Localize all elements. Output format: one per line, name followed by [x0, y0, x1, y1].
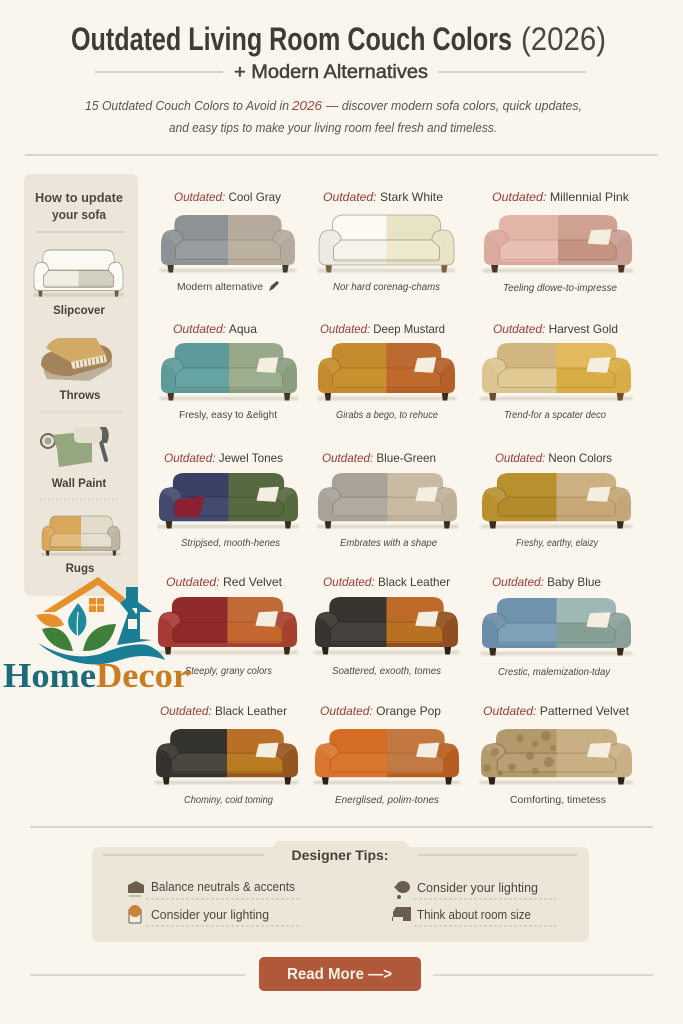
- card: blue-green: [317, 451, 458, 549]
- heading: Outdated: Baby Blue: [492, 575, 601, 589]
- icon: slipcover sofa: [33, 250, 124, 297]
- panel: designer tips: [92, 841, 589, 942]
- heading: Outdated: Jewel Tones: [164, 451, 283, 465]
- label: throws: Throws: [60, 390, 100, 402]
- label: wall paint: Wall Paint: [52, 478, 106, 490]
- tip: room size: Think about room size: [417, 908, 531, 922]
- sofa: [160, 343, 298, 400]
- heading: Outdated: Orange Pop: [320, 704, 441, 718]
- heading: Outdated: Aqua: [173, 322, 257, 336]
- caption: Fresly, easy to &elight: [179, 410, 277, 421]
- intro text: and easy tips to make your living room feel fresh and timeless.: [169, 120, 497, 135]
- logo wordmark: HomeDecor: [3, 656, 189, 695]
- intro text: 15 Outdated Couch Colors to Avoid in: [85, 98, 289, 113]
- sofa with red throw: [158, 473, 299, 529]
- sofa grid: [155, 190, 633, 806]
- title: Outdated Living Room Couch Colors: [71, 21, 512, 57]
- sofa: [157, 597, 298, 654]
- caption: Stripjsed, mooth-henes: [181, 538, 280, 549]
- card: aqua: [160, 322, 298, 421]
- tip: consider lighting: Consider your lighting: [151, 908, 269, 922]
- card: millennial pink: [483, 190, 633, 294]
- card: cool gray: [160, 190, 296, 293]
- card: red velvet: [157, 575, 298, 677]
- sofa: [481, 598, 632, 656]
- card: neon colors: [481, 451, 632, 549]
- icon: wall paint roller: [41, 427, 109, 467]
- sofa: [318, 215, 455, 272]
- sidebar heading: your sofa: [52, 208, 107, 222]
- button: read more: [259, 957, 421, 991]
- label: rugs: Rugs: [66, 563, 94, 575]
- heading: Outdated: Stark White: [323, 190, 443, 204]
- tip: room size: [392, 907, 556, 926]
- card: deep mustard: [317, 322, 456, 421]
- caption: Soattered, exooth, tomes: [332, 666, 441, 677]
- icon: rugs sofa: [41, 516, 121, 556]
- heading: Outdated: Patterned Velvet: [483, 704, 630, 718]
- heading: Outdated: Deep Mustard: [320, 322, 445, 336]
- tip: consider lighting, lamp icon: [394, 881, 556, 899]
- heading: Outdated: Black Leather: [323, 575, 450, 589]
- caption: Embrates with a shape: [340, 538, 437, 549]
- sofa with pattern: [480, 729, 633, 785]
- subtitle: + Modern Alternatives: [234, 62, 428, 83]
- button: read more: Read More —>: [287, 966, 392, 983]
- heading: Outdated: Harvest Gold: [493, 322, 618, 336]
- sidebar heading: How to update: [35, 191, 123, 205]
- card: stark white: [318, 190, 455, 293]
- intro text: 2026: [291, 98, 323, 113]
- sofa: [483, 215, 633, 272]
- heading: Outdated: Neon Colors: [495, 451, 612, 465]
- sofa: [317, 343, 456, 400]
- logo: HomeDecor: [3, 577, 191, 695]
- header: [71, 21, 606, 135]
- caption: Girabs a bego, to rehuce: [336, 410, 438, 421]
- tips heading: Designer Tips:: [292, 847, 388, 863]
- tip: consider lighting: [129, 905, 302, 926]
- caption: Freshy, earthy, elaizy: [516, 538, 599, 549]
- sofa: [314, 597, 459, 654]
- caption: Trend-for a spcater deco: [504, 410, 606, 421]
- sidebar heading: [35, 191, 123, 222]
- heading: Outdated: Red Velvet: [166, 575, 283, 589]
- card: black leather two-tone: [155, 704, 299, 806]
- sofa: [160, 215, 296, 272]
- icon: throws: [41, 338, 112, 381]
- heading: Outdated: Black Leather: [160, 704, 287, 718]
- heading: Outdated: Millennial Pink: [492, 190, 630, 204]
- card: jewel tones: [158, 451, 299, 549]
- caption: Energlised, polim-tones: [335, 795, 439, 806]
- card: baby blue: [481, 575, 632, 678]
- logo wave: [38, 643, 165, 664]
- card: orange pop: [314, 704, 460, 806]
- intro text: — discover modern sofa colors, quick updates,: [325, 98, 582, 113]
- caption: Nor hard corenag-chams: [333, 282, 440, 293]
- logo roof: [43, 577, 125, 612]
- tip: balance neutrals: [128, 880, 302, 899]
- sofa: [481, 343, 632, 400]
- tip: consider lighting, lamp icon: Consider your lighting: [417, 881, 538, 895]
- sofa: [155, 729, 299, 785]
- card: harvest gold: [481, 322, 632, 421]
- sofa: [314, 729, 460, 785]
- logo window: [89, 598, 104, 612]
- panel: how to update your sofa: [24, 174, 138, 596]
- tip: balance neutrals: Balance neutrals & accents: [151, 880, 295, 894]
- label: slipcover: Slipcover: [53, 305, 105, 317]
- heading: Outdated: Cool Gray: [174, 190, 281, 204]
- card: black leather: [314, 575, 459, 677]
- sofa: [481, 473, 632, 529]
- caption: Chominy, coid toming: [184, 795, 273, 806]
- caption: Crestic, malemization-tday: [498, 667, 611, 678]
- heading: Outdated: Blue-Green: [322, 451, 436, 465]
- logo house: [117, 587, 152, 645]
- caption: Teeling dlowe-to-impresse: [503, 283, 617, 294]
- title: (2026): [521, 21, 606, 57]
- caption: Modern alternative: [177, 282, 263, 293]
- intro text: [85, 98, 582, 135]
- caption: Comforting, timetess: [510, 795, 606, 806]
- logo leaves: [36, 603, 116, 652]
- caption: Steeply, grany colors: [185, 666, 272, 677]
- sofa: [317, 473, 458, 529]
- card: patterned velvet: [480, 704, 633, 806]
